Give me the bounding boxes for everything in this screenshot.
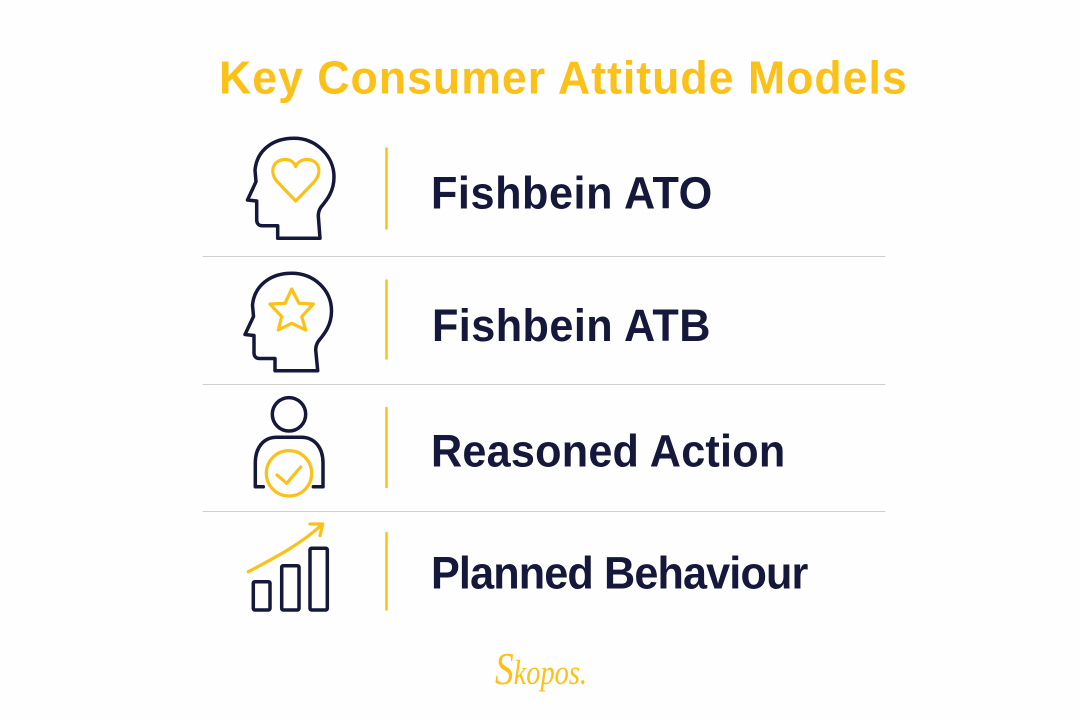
label: Fishbein ATB [432, 301, 710, 351]
icon: rising bars with arrow [248, 524, 327, 610]
divider [385, 533, 388, 610]
icon: head with heart [248, 138, 334, 238]
label: Reasoned Action [431, 427, 785, 477]
icon: head with star [245, 273, 332, 371]
row: Fishbein ATO [248, 138, 712, 238]
label: Fishbein ATO [431, 169, 712, 219]
logo: Skopos: Skopos. [495, 643, 587, 694]
divider [385, 408, 388, 487]
title: Key Consumer Attitude Models [219, 52, 907, 104]
icon: person with check [255, 398, 323, 496]
divider [385, 280, 388, 358]
row: Planned Behaviour [248, 524, 808, 610]
row: Fishbein ATB [245, 273, 710, 371]
divider [385, 148, 388, 228]
label: Planned Behaviour [431, 549, 808, 599]
row: Reasoned Action [255, 398, 785, 496]
